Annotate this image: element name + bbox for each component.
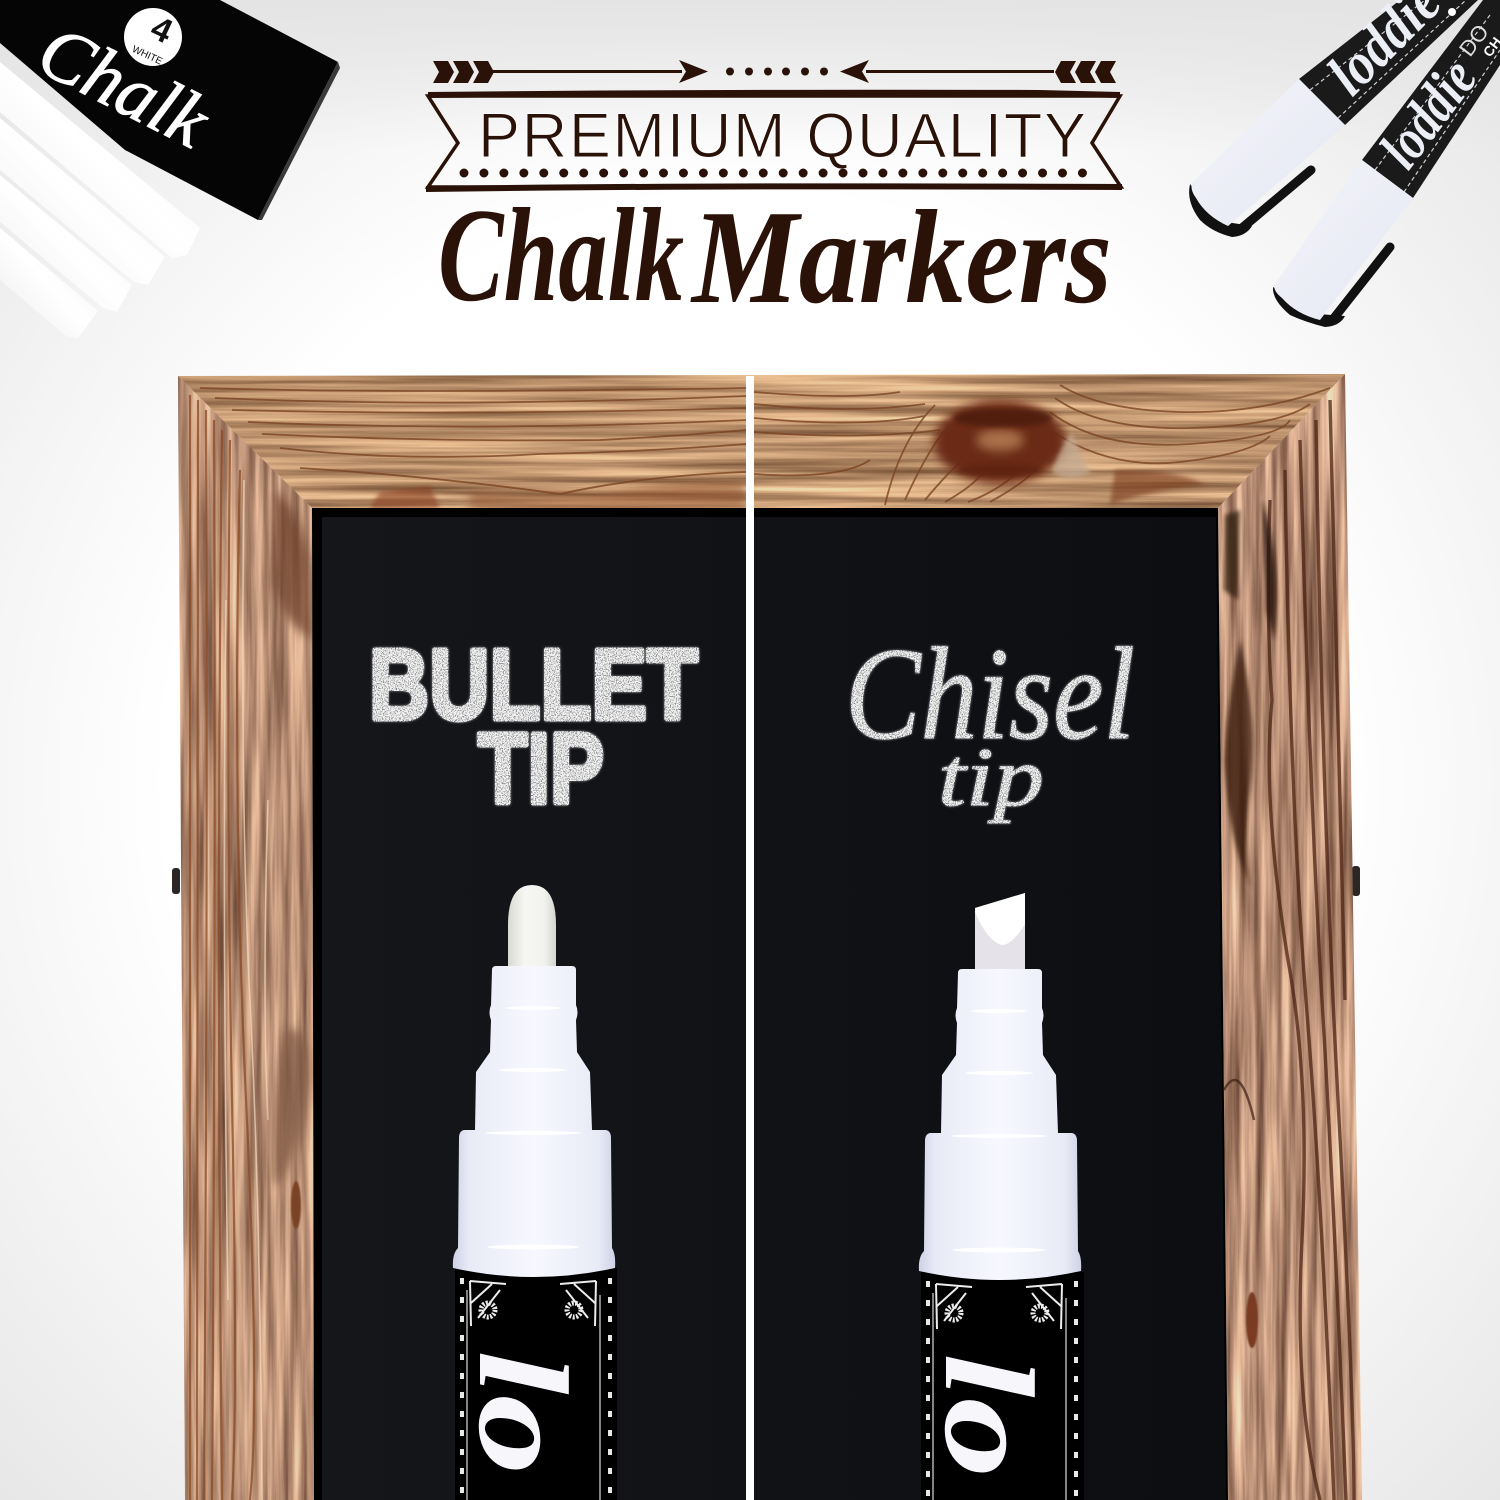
marker label [918, 1272, 1084, 1500]
count badge: WHITE [130, 44, 164, 68]
brand script: lo [452, 1350, 594, 1475]
frame top rail [170, 370, 1350, 510]
marker cap [919, 969, 1081, 1280]
marker two [1273, 0, 1500, 327]
bullet nib [508, 885, 556, 968]
hinges [172, 866, 1360, 896]
chisel tip heading: tip [938, 731, 1044, 824]
bullet tip heading [369, 629, 698, 825]
bullet tip heading: TIP [478, 713, 604, 825]
knot [934, 400, 1092, 484]
title: chalk markers: Markers [690, 183, 1112, 331]
title: chalk markers: Chalk [438, 181, 684, 329]
chalk sticks [0, 62, 200, 338]
frame right rail [1215, 370, 1365, 1500]
banner: premium quality [426, 93, 1122, 189]
frame left rail [170, 370, 320, 1500]
label ornaments [470, 1281, 596, 1326]
marker label [452, 1268, 617, 1500]
brand script: lo [918, 1353, 1060, 1478]
box label: Chalk [25, 8, 223, 165]
label ornaments [936, 1284, 1062, 1329]
bullet tip heading: BULLET [369, 629, 698, 741]
header arrows [433, 60, 1116, 83]
count badge: 4 [145, 9, 178, 51]
marker two: DO [1454, 20, 1494, 61]
banner dots [464, 168, 1098, 178]
marker cap [453, 966, 615, 1277]
banner heading: PREMIUM QUALITY [478, 101, 1086, 171]
chisel tip heading [845, 620, 1135, 824]
count badge [124, 8, 182, 68]
chisel tip marker [918, 893, 1084, 1500]
marker one [1189, 0, 1478, 237]
chalkboard panel [312, 508, 1228, 1500]
divider [746, 376, 754, 1500]
chisel nib [975, 893, 1025, 970]
top right markers [1189, 0, 1500, 327]
bullet tip marker [452, 885, 617, 1500]
chalk box [0, 0, 340, 220]
chisel tip heading: Chisel [845, 620, 1135, 767]
wooden frame [170, 370, 1365, 1500]
title: chalk markers [438, 181, 1112, 331]
